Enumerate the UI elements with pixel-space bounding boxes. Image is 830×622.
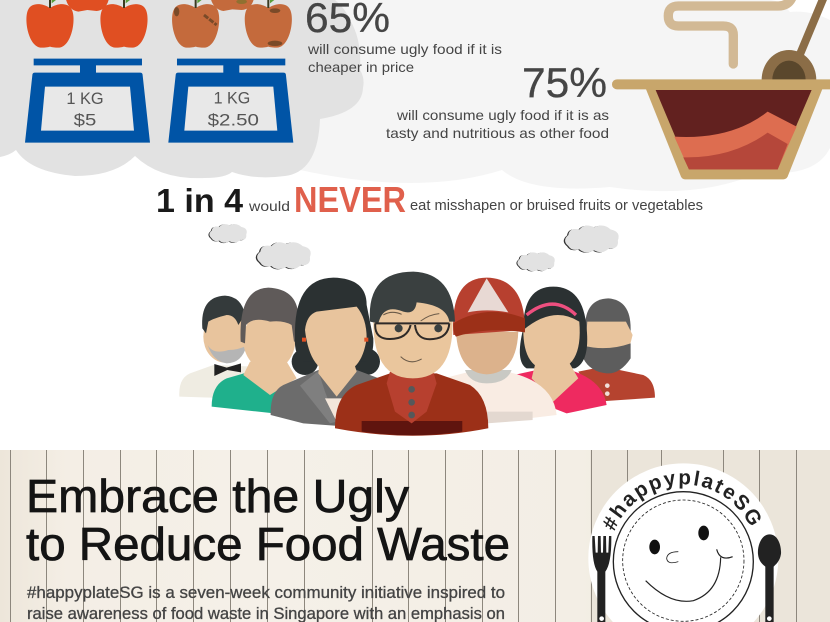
- stat: 65%: will consume ugly food if it is: [307, 41, 502, 57]
- wooden background panel: [0, 450, 830, 622]
- stat: 65%: [305, 0, 502, 75]
- person: man in teal shirt: [212, 288, 298, 414]
- person: man in red cap: [437, 278, 557, 423]
- stat: 75%: 75%: [522, 59, 607, 106]
- headline: 1 in 4 would NEVER: eat misshapen or bruised fruits or vegetables: [410, 198, 703, 214]
- headline: 1 in 4 would NEVER: 1 in 4: [156, 182, 244, 219]
- icon: fresh apples: [26, 0, 148, 48]
- person: woman in grey blazer: [271, 278, 383, 428]
- body text: #happyplateSG is a seven-week community initiative inspired to: [27, 584, 505, 602]
- grey cloud background: [0, 0, 364, 178]
- group of people with thought clouds: [179, 224, 655, 436]
- icon: scale 1 KG $5: $5: [74, 110, 96, 129]
- title: [26, 470, 510, 570]
- icon: scale 1 KG $2.50: [168, 59, 293, 143]
- icon: bruised apples: [172, 0, 292, 48]
- icon: spoon: [758, 534, 781, 622]
- stat: 65%: cheaper in price: [308, 59, 414, 75]
- headline: 1 in 4 would NEVER: would: [248, 198, 290, 214]
- icon: scale 1 KG $2.50: $2.50: [208, 110, 259, 129]
- title: Embrace the Ugly: [26, 470, 409, 522]
- stat: 75%: will consume ugly food if it is as: [396, 107, 609, 123]
- icon: soup bowl with spoon and steam: [617, 0, 830, 179]
- logo: happy plate: [588, 463, 782, 622]
- person: woman in pink top with headband: [517, 287, 607, 413]
- logo text: #happyplateSG: [603, 470, 760, 531]
- person: central man with glasses in red shirt: [335, 272, 488, 436]
- light cloud background: [300, 0, 830, 191]
- person: man with full beard: [578, 298, 655, 402]
- headline: 1 in 4 would NEVER: [156, 179, 703, 220]
- headline: 1 in 4 would NEVER: NEVER: [294, 179, 406, 220]
- apples and scales: [25, 0, 293, 143]
- thought clouds: [208, 224, 619, 271]
- icon: scale 1 KG $5: 1 KG: [66, 89, 104, 108]
- stat: 75%: tasty and nutritious as other food: [386, 125, 609, 141]
- icon: scale 1 KG $2.50: 1 KG: [214, 88, 250, 107]
- title: to Reduce Food Waste: [26, 518, 510, 570]
- icon: scale 1 KG $5: [25, 59, 150, 143]
- body text: [27, 584, 505, 622]
- icon: fork: [592, 536, 611, 622]
- stat: 75%: [386, 59, 609, 141]
- person: bearded man with bow tie: [179, 296, 253, 399]
